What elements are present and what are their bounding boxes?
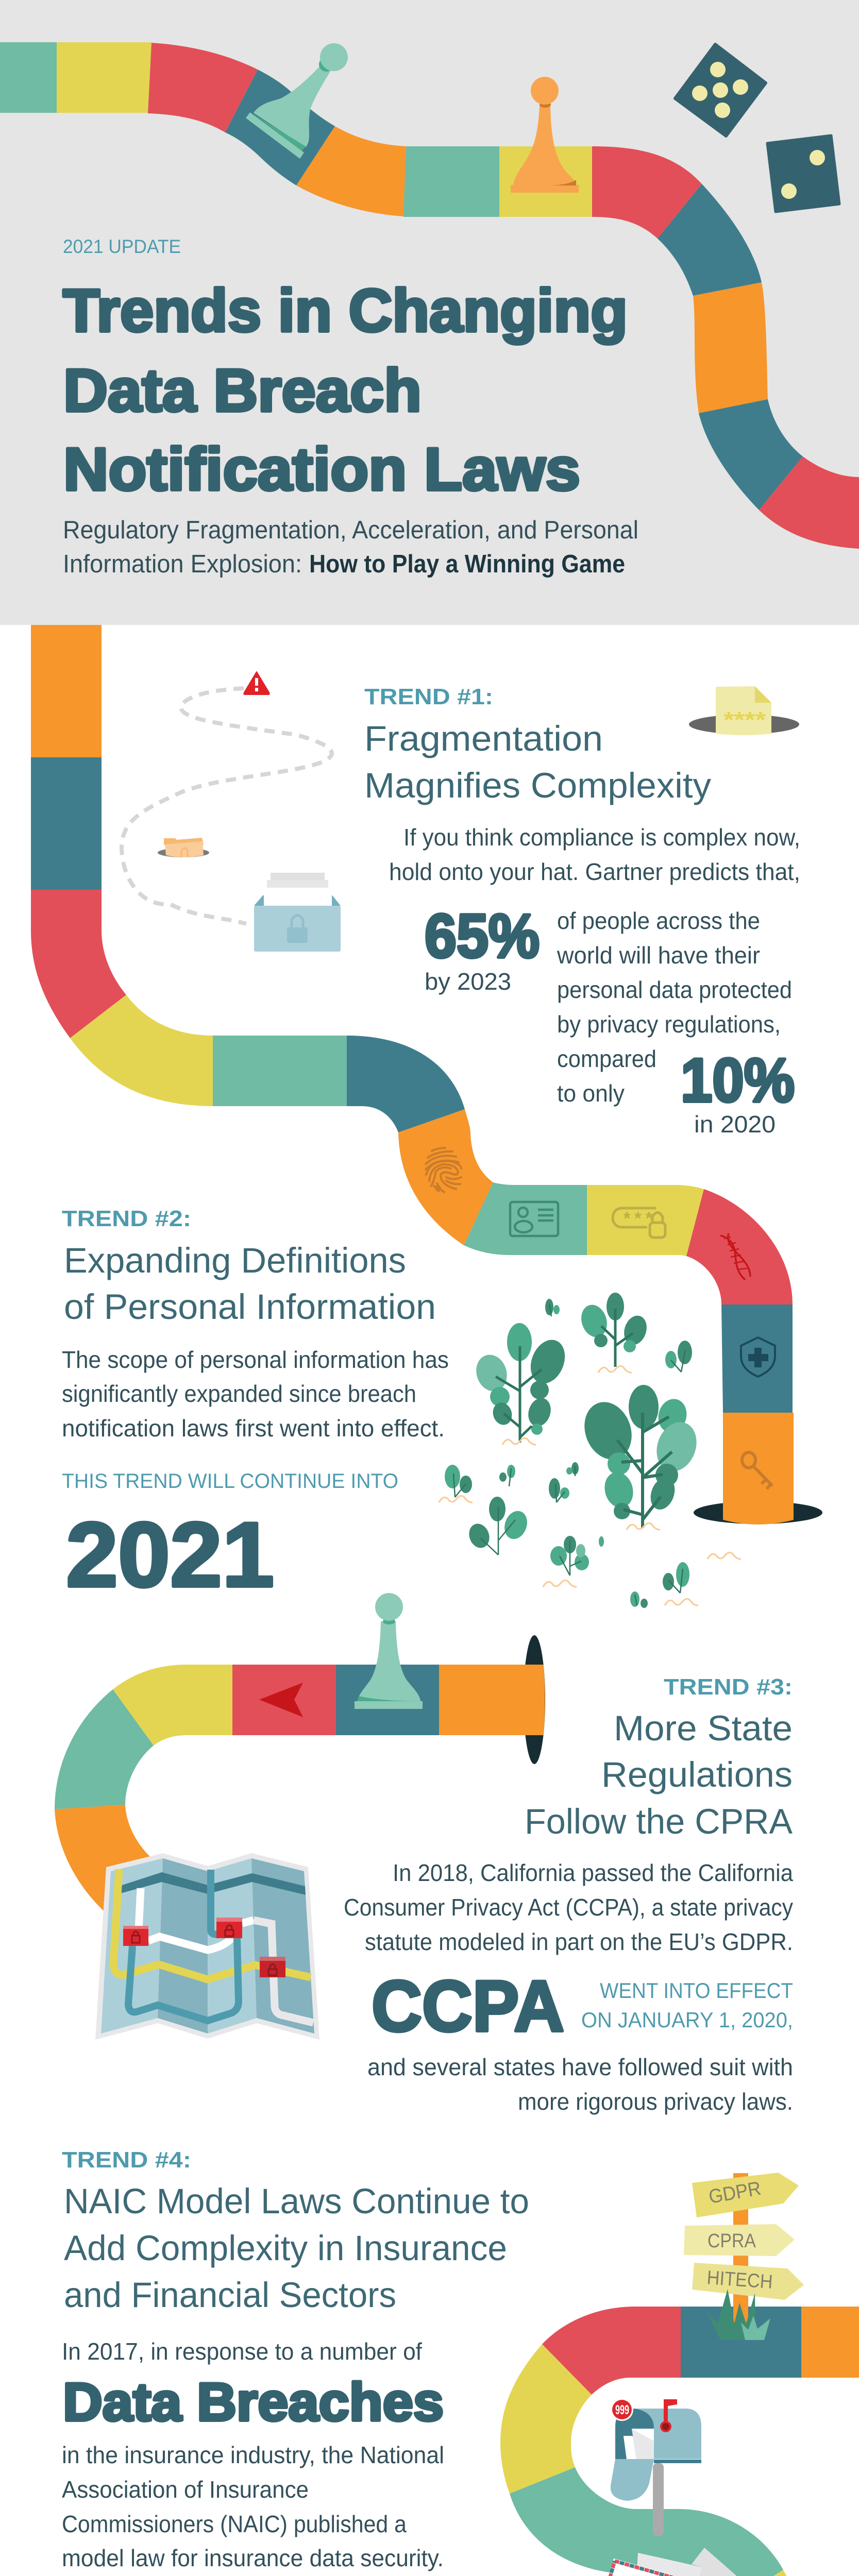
icon: green game pawn — [355, 1593, 423, 1709]
trend 3 text block: CCPA — [372, 1965, 564, 2046]
icon: key — [742, 1452, 772, 1489]
title — [63, 277, 628, 503]
trend 2 text block: 2021 — [66, 1503, 274, 1606]
trend 4 text block: Commissioners (NAIC) published a — [62, 2511, 407, 2537]
title: Notification Laws — [63, 435, 580, 503]
trend 2 text block — [62, 1206, 449, 1606]
trend 1 text block: world will have their — [557, 942, 760, 969]
icon: signpost — [684, 2173, 804, 2340]
trend 1 text block: Magnifies Complexity — [364, 766, 711, 805]
board game track: header — [0, 42, 859, 549]
icon: orange game pawn — [511, 77, 579, 193]
sign: CPRA — [684, 2224, 795, 2256]
trend 1 text block: personal data protected — [557, 976, 792, 1003]
icon: folder in hole — [158, 838, 209, 857]
trend 2 text block: Expanding Definitions — [64, 1241, 406, 1280]
trend 1 text block: of people across the — [557, 907, 760, 934]
header background — [0, 0, 859, 625]
trend 4 text block: in the insurance industry, the National — [62, 2442, 444, 2468]
illustration: plants — [439, 1293, 741, 1608]
icon: password lock — [613, 1208, 665, 1238]
trend 1 text block: to only — [557, 1080, 625, 1107]
icon: id card — [510, 1202, 558, 1236]
plant A — [471, 1323, 571, 1445]
trend 1 text block: Fragmentation — [364, 719, 603, 758]
trend 1 text block: by 2023 — [425, 968, 511, 995]
trend 1 text block: compared — [557, 1045, 656, 1072]
trend 4 text block: and Financial Sectors — [64, 2275, 396, 2315]
subtitle: Information Explosion: — [63, 550, 302, 578]
trend 1 text block: 10% — [681, 1046, 795, 1115]
grass — [706, 2289, 755, 2340]
trend 3 text block — [344, 1674, 793, 2115]
trend 2 text block: of Personal Information — [64, 1287, 436, 1327]
trend 3 text block: Follow the CPRA — [525, 1802, 793, 1841]
dashed path — [122, 688, 332, 924]
trend 2 text block: notification laws first went into effect. — [62, 1415, 445, 1442]
trend 3 text block: ON JANUARY 1, 2020, — [581, 2008, 793, 2032]
trend 3 text block: more rigorous privacy laws. — [518, 2088, 793, 2115]
trend 3 text block: and several states have followed suit with — [367, 2054, 793, 2080]
board game track: trend 1 and 2 — [31, 625, 822, 1524]
icon: shield with cross — [741, 1337, 775, 1377]
subtitle: Regulatory Fragmentation, Acceleration, and Personal — [63, 516, 638, 544]
trend 2 text block: The scope of personal information has — [62, 1346, 449, 1373]
small plants — [445, 1299, 692, 1608]
icon: mailbox — [611, 2398, 701, 2536]
trend 3 text block: More State — [614, 1708, 793, 1748]
icon: locked box with papers — [254, 873, 341, 952]
trend 1 text block — [364, 684, 800, 1138]
eyebrow: 2021 update: 2021 UPDATE — [63, 236, 181, 257]
icon: password lock: *** — [624, 1209, 653, 1228]
badge: 999 — [611, 2398, 633, 2421]
sign: GDPR — [692, 2173, 799, 2217]
badge: 999: 999 — [615, 2403, 629, 2417]
title: Trends in Changing — [63, 277, 628, 344]
trend 2 text block: TREND #2: — [62, 1206, 191, 1231]
trend 3 text block: WENT INTO EFFECT — [600, 1978, 793, 2003]
sign: CPRA: CPRA — [708, 2230, 756, 2252]
icon: password paper in hole — [689, 686, 799, 735]
icon: tilted green game pawn — [246, 43, 348, 159]
subtitle: How to Play a Winning Game — [309, 550, 625, 578]
subtitle — [63, 516, 638, 578]
trend 4 text block: Data Breaches — [63, 2372, 444, 2432]
icon: five-spot die — [675, 44, 766, 136]
trend 3 text block: In 2018, California passed the California — [393, 1859, 793, 1886]
trend 1 text block: by privacy regulations, — [557, 1011, 781, 1038]
trend 3 text block: Consumer Privacy Act (CCPA), a state privacy — [344, 1894, 793, 1921]
trend 1 text block: If you think compliance is complex now, — [403, 824, 800, 851]
title: Data Breach — [63, 357, 422, 424]
icon: warning triangle — [244, 672, 270, 694]
trend 4 text block: In 2017, in response to a number of — [62, 2338, 422, 2365]
plant B — [577, 1293, 650, 1372]
trend 3 text block: statute modeled in part on the EU’s GDPR. — [365, 1928, 793, 1955]
trend 1 text block: hold onto your hat. Gartner predicts that, — [389, 858, 800, 885]
icon: fingerprint — [426, 1148, 461, 1192]
icon: dna strand — [720, 1233, 750, 1280]
trend 4 text block: model law for insurance data security. — [62, 2545, 444, 2571]
trend 1 text block: 65% — [425, 902, 540, 971]
trend 1 text block: in 2020 — [694, 1111, 776, 1138]
trend 4 text block: TREND #4: — [62, 2147, 191, 2173]
trend 2 text block: significantly expanded since breach — [62, 1380, 416, 1407]
trend 4 text block: Add Complexity in Insurance — [64, 2228, 507, 2268]
trend 3 text block: TREND #3: — [664, 1674, 793, 1700]
trend 2 text block: THIS TREND WILL CONTINUE INTO — [62, 1470, 398, 1493]
icon: red locked folders — [123, 1918, 285, 1977]
icon: two-spot die — [767, 135, 839, 212]
sign: GDPR: GDPR — [707, 2178, 763, 2208]
board game track: trend 4 — [367, 2307, 859, 2576]
board game track: trend 3 — [55, 1635, 545, 1911]
plant C — [577, 1385, 703, 1530]
trend 3 text block: Regulations — [601, 1755, 793, 1794]
icon: password paper in hole: **** — [723, 707, 766, 733]
trend 4 text block — [62, 2147, 529, 2571]
trend 4 text block: Association of Insurance — [62, 2476, 309, 2503]
icon: letters and envelopes — [585, 2548, 759, 2576]
trend 1 text block: TREND #1: — [364, 684, 493, 709]
sign: HITECH — [692, 2263, 804, 2300]
trend 4 text block: NAIC Model Laws Continue to — [64, 2181, 529, 2221]
illustration: folded map — [95, 1853, 319, 2040]
sign: HITECH: HITECH — [706, 2267, 773, 2293]
